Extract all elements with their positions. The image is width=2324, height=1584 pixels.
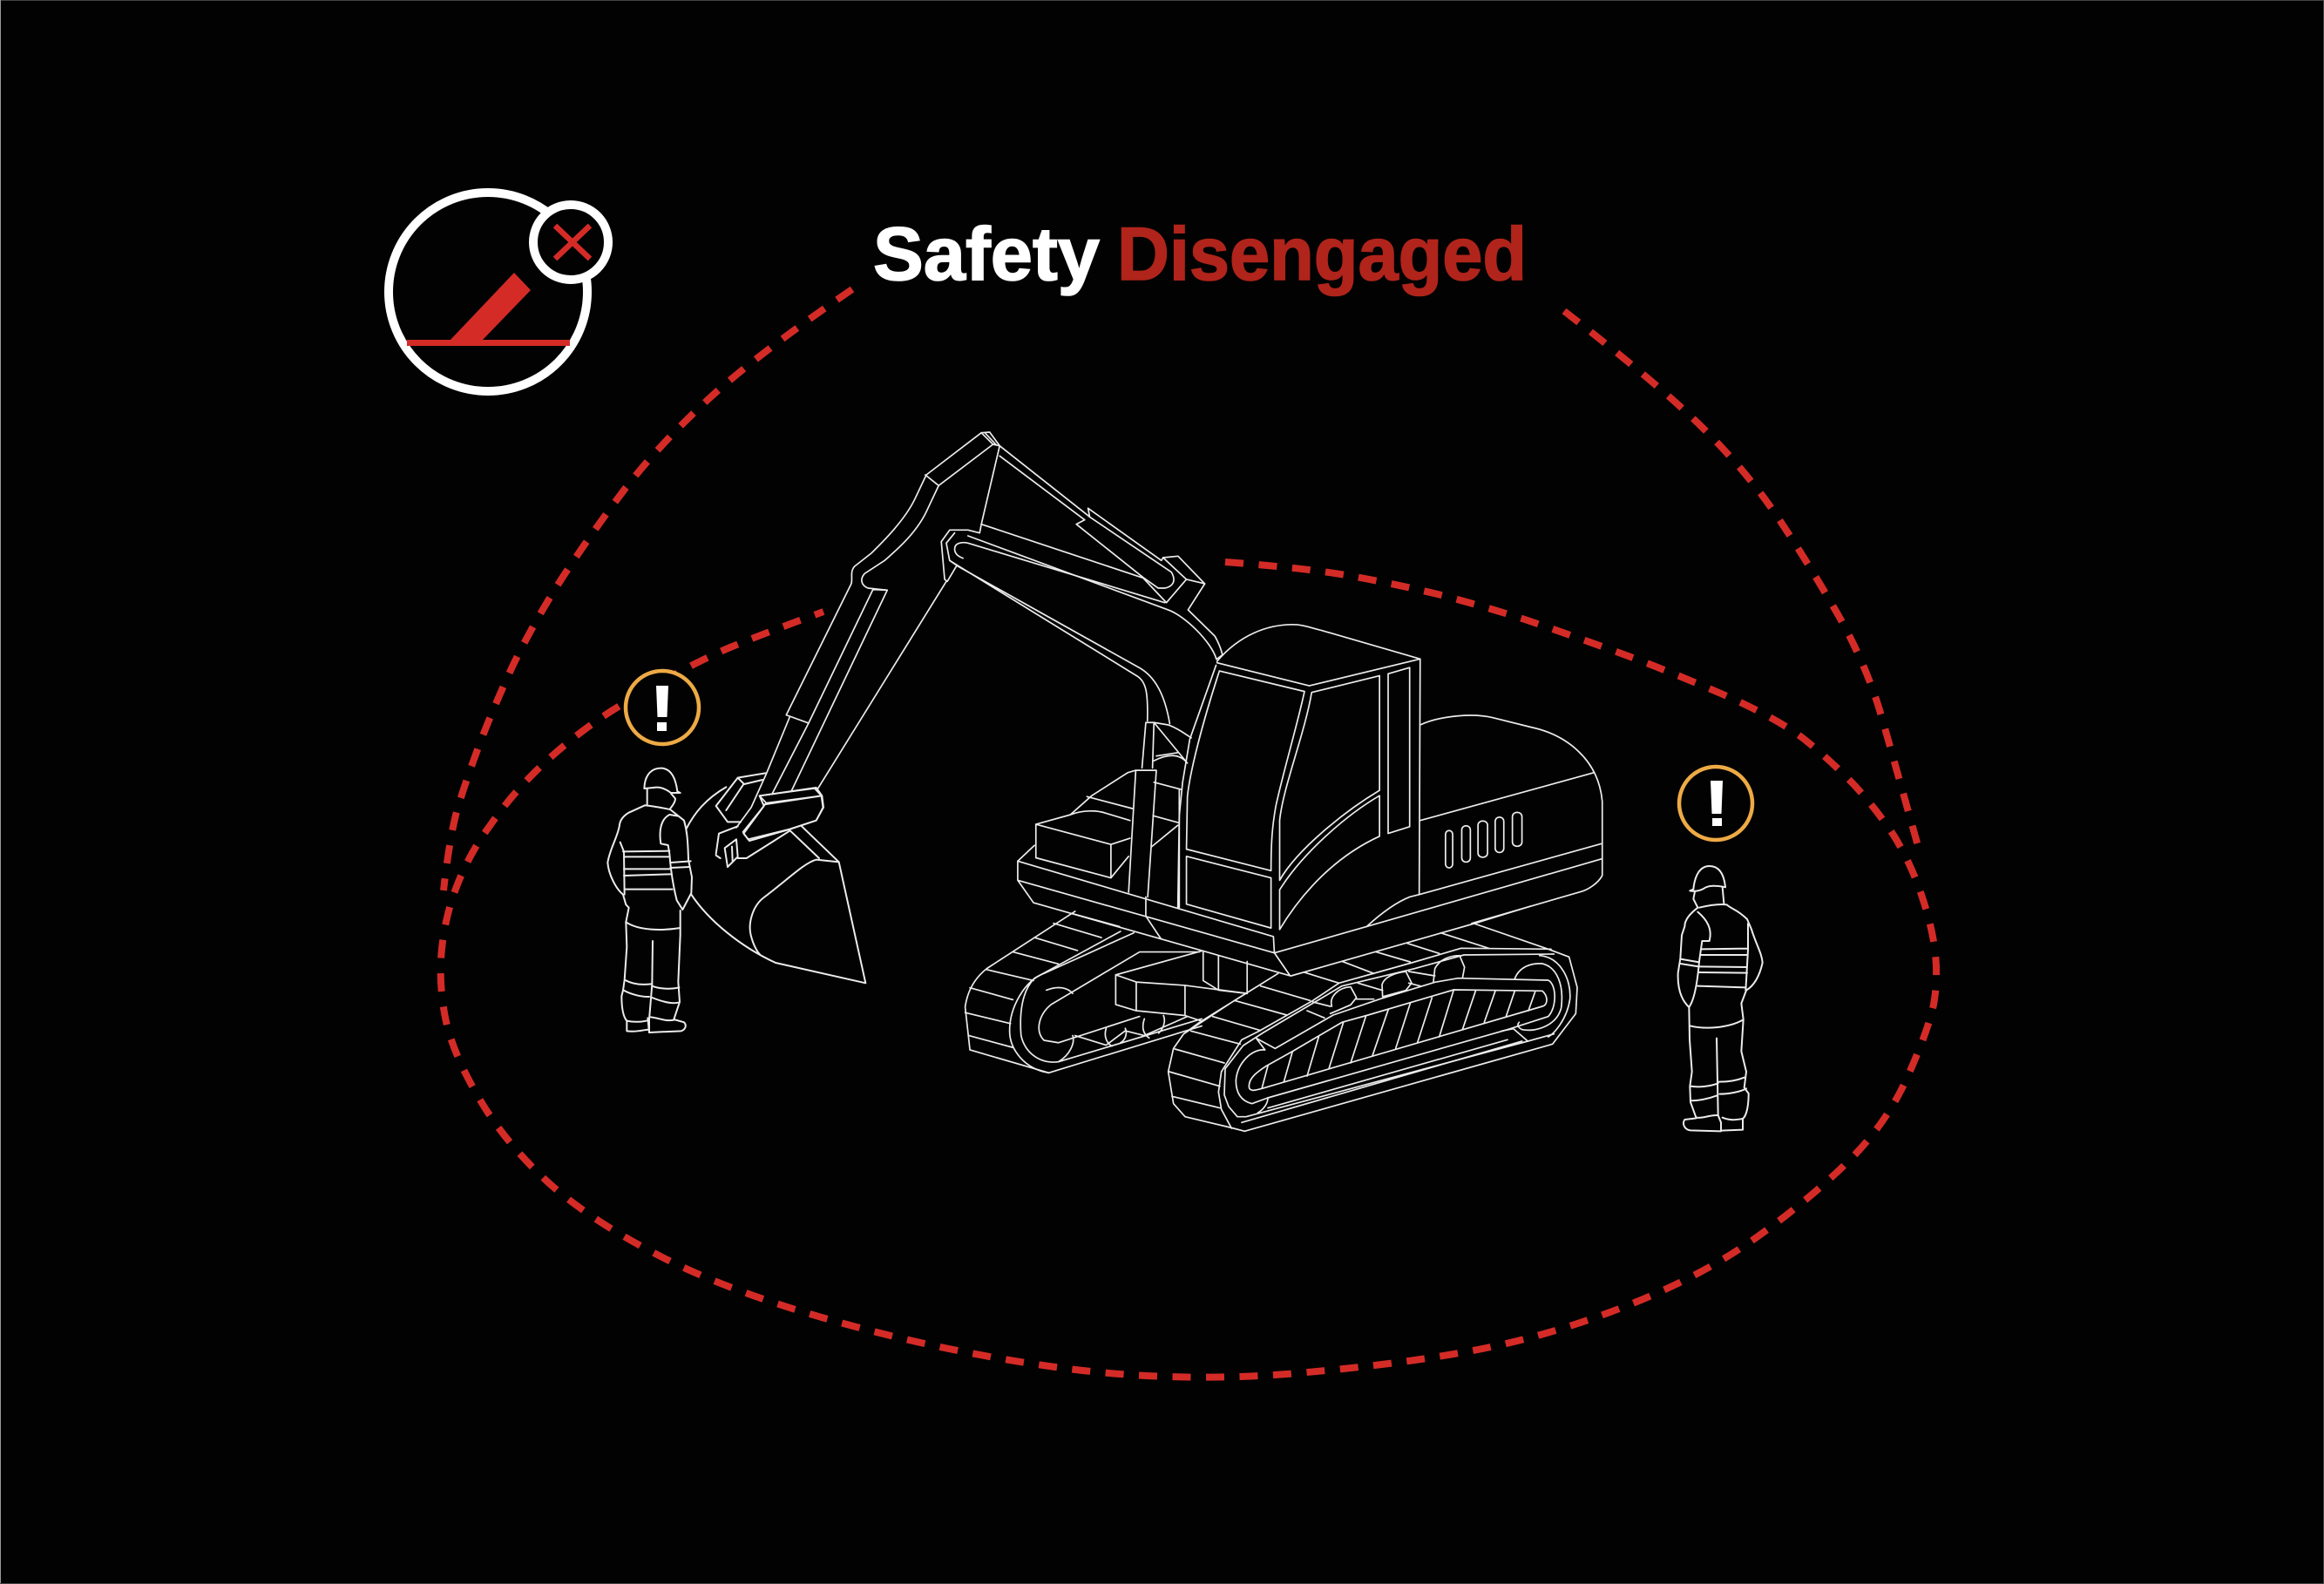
- dashed danger zone: outer boundary right: [1564, 311, 1920, 852]
- cab: [1178, 625, 1420, 930]
- excavator bucket and coupler: [686, 773, 865, 983]
- icon: safety disengaged gauge: [389, 193, 608, 391]
- upper deck and counterweight: [1018, 722, 1291, 976]
- excavator: [736, 432, 1602, 1131]
- title: Safety: [873, 213, 1100, 296]
- left track: [966, 911, 1202, 1073]
- warning icon right: [1679, 767, 1752, 840]
- dashed danger zone: outer boundary left: [444, 289, 852, 890]
- dashed danger zone: inner boundary: [441, 562, 1936, 1378]
- undercarriage: [1115, 951, 1247, 1021]
- worker left with bucket: [607, 768, 865, 1032]
- title: [873, 213, 1527, 296]
- right track: [1169, 906, 1577, 1131]
- excavator boom and arm: [736, 432, 1223, 839]
- title: Disengaged: [1117, 213, 1527, 296]
- worker figure left: [607, 768, 692, 1032]
- warning icon left: [626, 671, 699, 744]
- worker figure right: [1678, 866, 1763, 1131]
- engine housing: [1274, 715, 1602, 953]
- excavator body, cab and left track: [966, 625, 1602, 1073]
